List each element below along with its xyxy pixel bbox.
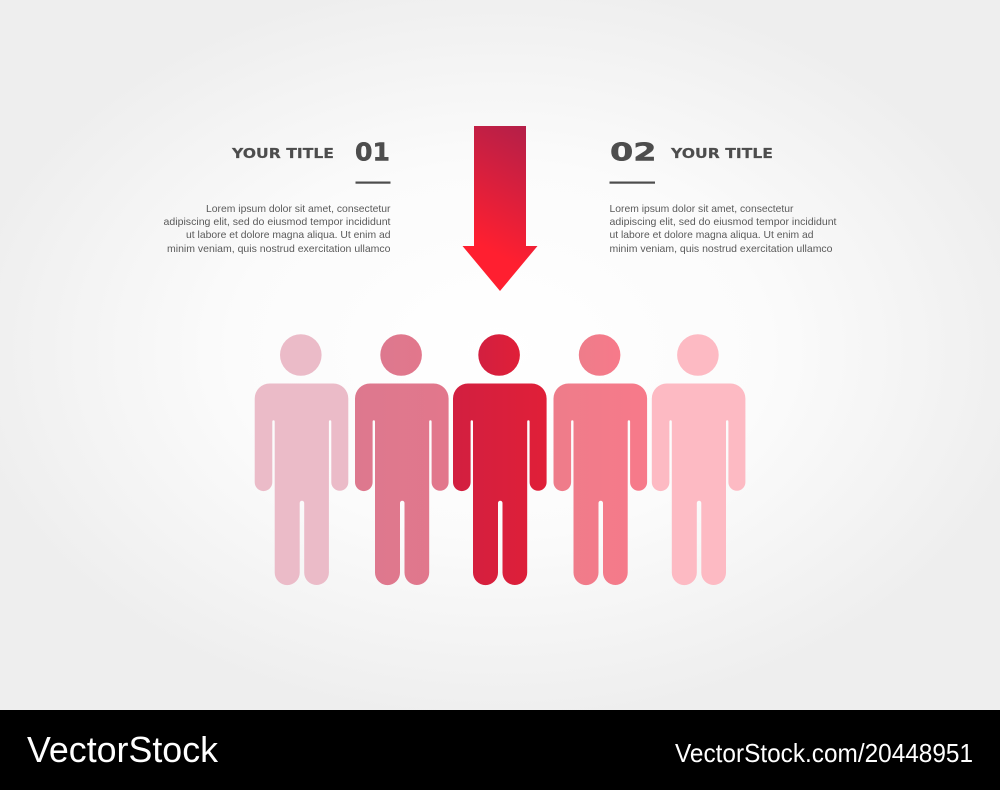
text block 02: Lorem ipsum dolor sit amet, consectetur (610, 203, 794, 215)
heading: your title 02: YOUR TITLE (670, 146, 773, 162)
arrow: pointing down (462, 126, 538, 291)
rule 02 (610, 182, 655, 184)
text block 02 (610, 203, 837, 255)
person 2 (355, 334, 449, 585)
number 02: 02 (610, 138, 656, 166)
text block 01: Lorem ipsum dolor sit amet, consectetur (206, 203, 391, 215)
person 1 (255, 334, 348, 585)
text block 02: minim veniam, quis nostrud exercitation ullamco (610, 243, 833, 255)
footer url: VectorStock.com/20448951 (675, 738, 973, 768)
panel: section 02 (610, 138, 837, 255)
footer logo: VectorStock (27, 729, 219, 770)
text block 01: ut labore et dolore magna aliqua. Ut enim ad (186, 229, 391, 241)
rule 01 (356, 182, 390, 184)
text block 02: adipiscing elit, sed do eiusmod tempor incididunt (610, 216, 837, 228)
text block 01 (164, 203, 391, 255)
person 4 (554, 334, 647, 585)
text block 01: adipiscing elit, sed do eiusmod tempor incididunt (164, 216, 391, 228)
number 01: 01 (355, 138, 390, 166)
footer bar (0, 710, 1000, 790)
person 5 (652, 334, 745, 585)
text block 02: ut labore et dolore magna aliqua. Ut enim ad (610, 229, 814, 241)
heading: your title 01: YOUR TITLE (231, 146, 334, 162)
people row (255, 334, 745, 585)
text block 01: minim veniam, quis nostrud exercitation ullamco (167, 243, 391, 255)
panel: section 01 (164, 138, 391, 255)
person 3 (453, 334, 547, 585)
